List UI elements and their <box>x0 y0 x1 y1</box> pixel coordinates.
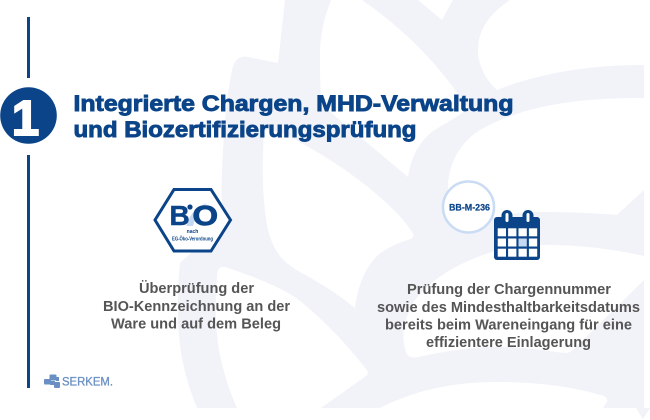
title <box>74 91 514 142</box>
icon: BIO hexagon seal: O <box>192 200 218 231</box>
text block: BIO check: Ware und auf dem Beleg <box>111 316 281 332</box>
title: und Biozertifizierungsprüfung <box>74 117 416 142</box>
logo: SERKEM <box>44 374 113 388</box>
text block: batch and best-before check: sowie des Mindesthaltbarkeitsdatums <box>377 300 640 316</box>
text block: batch and best-before check <box>377 282 640 351</box>
text block: batch and best-before check: Prüfung der Chargennummer <box>407 282 611 298</box>
icon: BIO hexagon seal: nach <box>187 229 198 235</box>
text block: BIO check: Überprüfung der <box>139 280 254 297</box>
text block: batch and best-before check: effizientere Einlagerung <box>426 335 591 351</box>
icon: batch number circle: BB-M-236 <box>449 202 490 214</box>
icon: batch number circle <box>443 182 494 232</box>
title: Integrierte Chargen, MHD-Verwaltung <box>74 91 514 116</box>
text block: batch and best-before check: bereits beim Wareneingang für eine <box>385 318 632 334</box>
number badge: 1 <box>12 92 39 146</box>
vertical rule <box>27 17 30 388</box>
text block: BIO check <box>103 280 290 332</box>
text block: BIO check: BIO-Kennzeichnung an der <box>103 299 290 315</box>
number badge <box>0 87 57 146</box>
icon: BIO hexagon seal: B <box>170 200 190 231</box>
logo: SERKEM: SERKEM. <box>62 376 113 388</box>
icon: BIO hexagon seal <box>155 190 230 251</box>
icon: BIO hexagon seal: EG-Öko-Verordnung <box>172 236 213 242</box>
icon: calendar <box>494 210 540 260</box>
